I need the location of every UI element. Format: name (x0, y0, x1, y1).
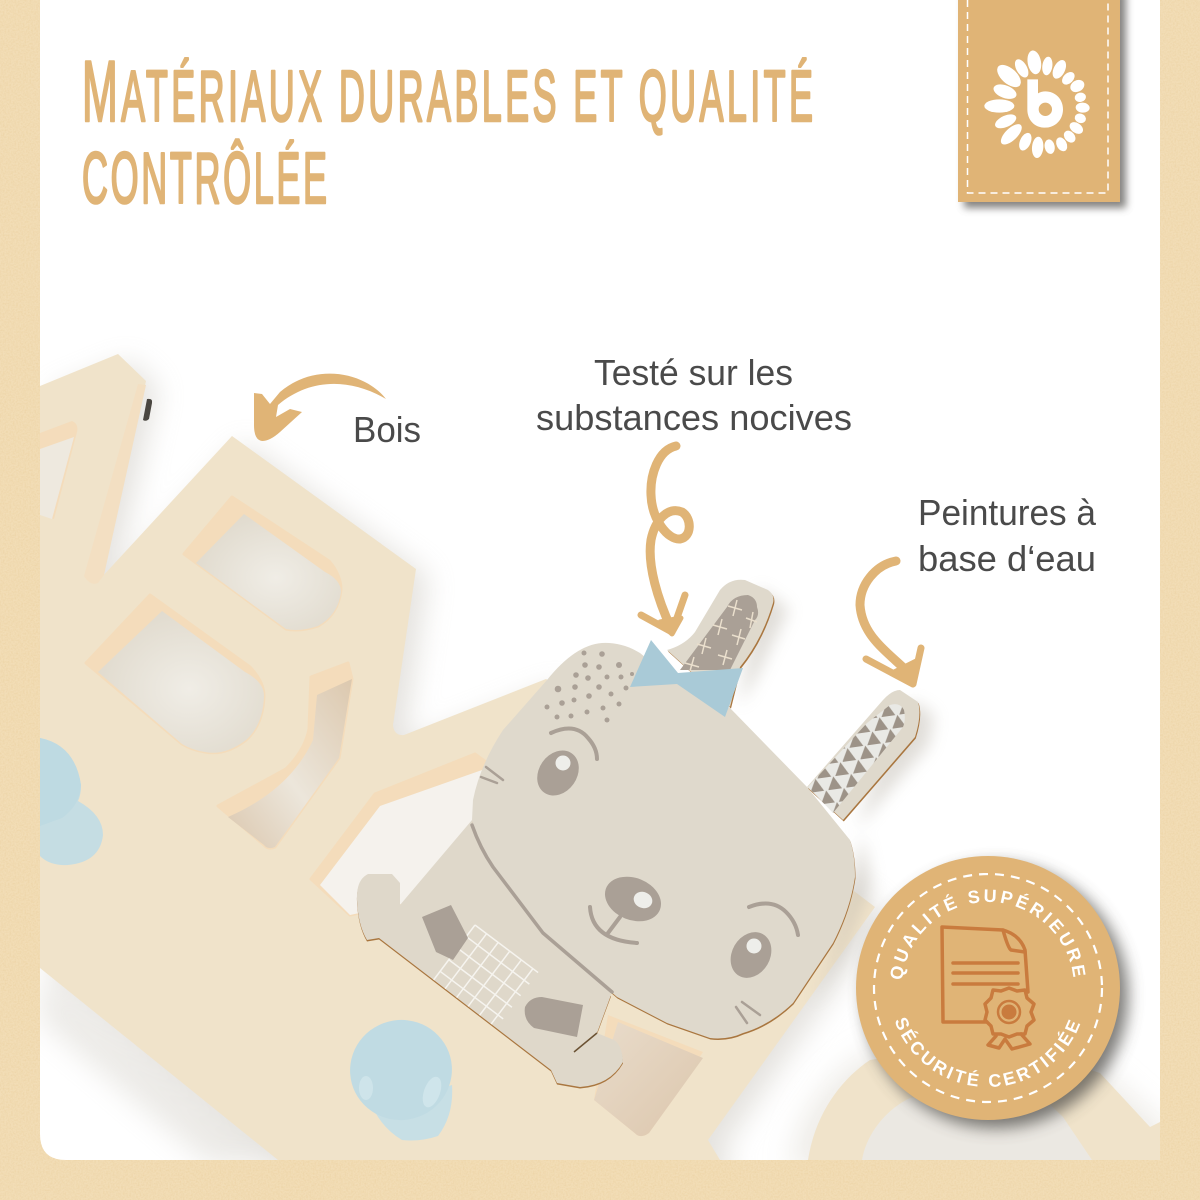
lower right wooden ring (808, 1059, 1160, 1160)
arrow: peintures (860, 561, 921, 684)
label: peintures (918, 492, 1097, 579)
tag shadow (964, 0, 1126, 208)
label: peintures: Peintures à (918, 492, 1097, 533)
grid pattern (433, 924, 538, 1024)
arrow: bois (254, 374, 386, 441)
left peg (40, 738, 103, 865)
nose and mouth (588, 876, 661, 945)
triangle pattern (808, 704, 905, 813)
label: substances: substances nocives (536, 397, 852, 438)
cut-out A (40, 421, 77, 519)
right eye and brow (730, 902, 800, 978)
quality badge (852, 852, 1140, 1140)
cut-out B lower (86, 595, 264, 753)
badge text bottom: SÉCURITÉ CERTIFIÉE (896, 1018, 1080, 1087)
title: MATÉRIAUX DURABLES ET QUALITÉ (82, 44, 813, 140)
bunny drop shadows (739, 588, 934, 1006)
badge shadow (864, 864, 1128, 1128)
whiskers (481, 767, 760, 1023)
neck line (472, 825, 612, 992)
badge disc (856, 856, 1120, 1120)
ring opening (862, 1098, 1092, 1160)
wooden board (40, 354, 875, 1160)
cut-out Y right (311, 754, 490, 915)
head (472, 643, 856, 1040)
brand logo (984, 49, 1090, 158)
badge text top: QUALITÉ SUPÉRIEURE (890, 889, 1086, 979)
notch rim between letters (101, 385, 146, 578)
body patches (422, 905, 468, 960)
title (82, 44, 813, 219)
label: substances (536, 352, 852, 438)
brand tag (958, 0, 1126, 208)
arrow: substances (641, 446, 689, 634)
ear front (807, 690, 920, 822)
title: CONTRÔLÉE (82, 138, 327, 219)
cheek dots (544, 650, 634, 722)
cut-out B upper (184, 497, 341, 630)
bunny (357, 580, 934, 1088)
wood shadow (40, 361, 887, 1182)
body (357, 820, 623, 1088)
icon: certificate (942, 927, 1034, 1049)
product photo: wooden bunny coat rack (40, 354, 1170, 1182)
tag body (958, 0, 1120, 202)
left eye and brow (537, 726, 599, 796)
cut-out Y left (218, 663, 352, 848)
dark screw behind letter (143, 399, 152, 421)
label: peintures: base d‘eau (918, 538, 1096, 579)
lower right ring shadow (790, 1050, 1160, 1160)
blue bow (630, 640, 743, 717)
ear back (667, 580, 774, 708)
cut-out bottom (594, 1015, 703, 1136)
label: bois: Bois (353, 409, 421, 450)
ear inner stitched (680, 595, 758, 671)
label: substances: Testé sur les (594, 352, 793, 393)
bottom peg (350, 1020, 452, 1140)
